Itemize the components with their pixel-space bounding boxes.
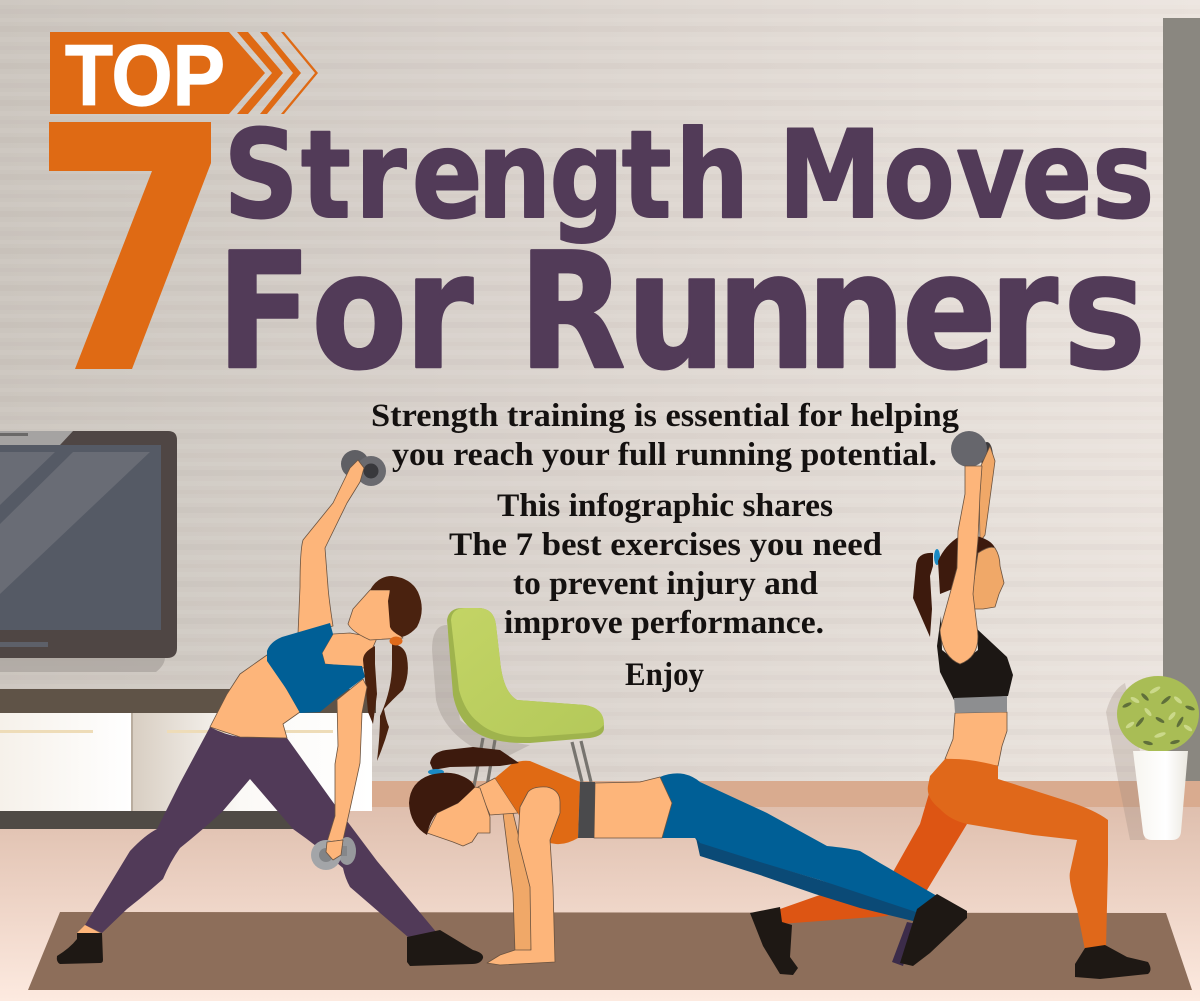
right ponytail: [377, 644, 408, 761]
lower dumbbell: [311, 837, 356, 870]
front raised arm: [940, 466, 982, 664]
floor: [0, 781, 1200, 1001]
raised dumbbell: [341, 450, 386, 486]
sports bra: [267, 623, 365, 713]
title line 1: Strength Moves: [224, 104, 1154, 246]
torso: [210, 655, 300, 738]
woman 1: standing side bend with dumbbells: [57, 450, 483, 966]
woman 3: lunge with overhead weight: [750, 431, 1150, 979]
intro text: Strength training is essential for helping: [371, 398, 960, 434]
hand over dumbbell: [326, 840, 343, 860]
plant in white pot: [1106, 676, 1199, 840]
weight: [951, 431, 993, 472]
wall background: [0, 0, 1200, 782]
front shoe: [1075, 945, 1150, 979]
big number 7: [49, 122, 211, 369]
belly: [945, 712, 1007, 766]
waistband: [578, 782, 595, 838]
ponytail: [430, 747, 519, 770]
tv cabinet: [0, 689, 376, 829]
face: [348, 590, 403, 640]
grey band: [954, 696, 1007, 713]
front arm: [487, 787, 560, 965]
purple sock: [892, 922, 917, 966]
hair tie: [390, 636, 402, 646]
back arm: [503, 813, 531, 953]
plank shoe: [900, 894, 967, 966]
description text: [449, 488, 882, 641]
belly: [594, 777, 672, 838]
ponytail: [913, 553, 933, 637]
chevrons: [237, 32, 318, 114]
hair tie: [934, 549, 940, 565]
yoga mat: [28, 912, 1192, 990]
orange top: [495, 761, 580, 844]
face: [972, 547, 1004, 609]
leggings: [660, 773, 937, 918]
legs: [85, 727, 437, 937]
description text: This infographic shares: [497, 488, 833, 524]
white pot: [1133, 751, 1188, 840]
top label: TOP: [65, 28, 225, 124]
left ankle: [77, 925, 100, 933]
left ponytail strand: [363, 646, 377, 724]
back shoe: [750, 907, 798, 975]
plant shadow: [1106, 683, 1145, 840]
left shoe: [57, 933, 103, 964]
chair legs: [474, 738, 591, 786]
description text: improve performance.: [504, 605, 824, 641]
enjoy text: Enjoy: [625, 657, 704, 693]
front leg: [928, 759, 1108, 950]
right shoe: [407, 930, 483, 966]
top banner: [50, 28, 318, 124]
neck and chest: [478, 778, 518, 815]
back arm: [979, 446, 995, 542]
neck and chest: [322, 633, 377, 668]
television: [0, 431, 177, 672]
hair tie: [428, 769, 444, 775]
chair: [432, 608, 604, 786]
leggings shadow: [696, 838, 925, 921]
intro text: [371, 398, 960, 473]
right wall column: [1163, 18, 1200, 782]
foliage: [1117, 676, 1199, 752]
intro text: you reach your full running potential.: [392, 437, 937, 473]
hair: [409, 773, 475, 835]
black sports bra: [937, 616, 1013, 700]
description text: The 7 best exercises you need: [449, 527, 882, 563]
lowered arm: [327, 679, 367, 842]
hair: [370, 576, 422, 637]
raised arm: [298, 460, 364, 634]
face: [427, 787, 490, 846]
chair shadow: [432, 625, 530, 760]
description text: to prevent injury and: [513, 566, 818, 602]
hair: [938, 535, 995, 609]
back leg: [780, 790, 967, 924]
woman 2: plank position: [409, 747, 967, 966]
title line 2: For Runners: [217, 220, 1146, 405]
